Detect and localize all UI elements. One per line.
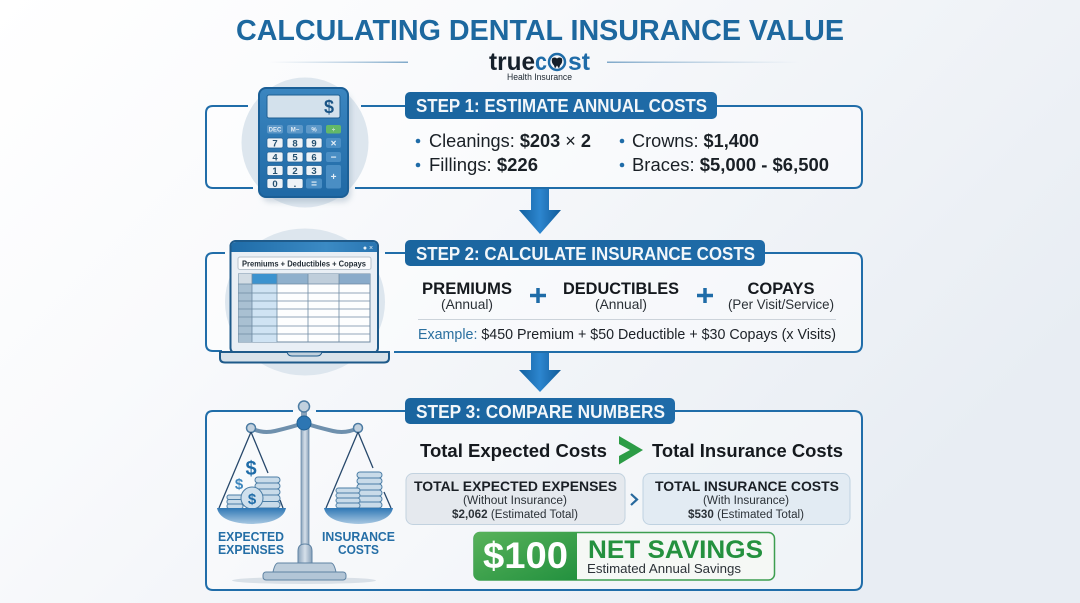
box: total expected expenses: $2,062 (Estimated Total) bbox=[452, 509, 578, 521]
panel 1 frame bbox=[206, 106, 862, 188]
logo: truecost health insurance bbox=[270, 48, 800, 82]
panel 3 frame bbox=[206, 411, 862, 590]
icon: calculator: 3 bbox=[311, 166, 317, 177]
icon: calculator: + bbox=[331, 172, 337, 183]
net savings callout: NET SAVINGS bbox=[588, 536, 763, 564]
icon: calculator: 0 bbox=[272, 179, 278, 190]
icon: laptop with spreadsheet: ● × bbox=[363, 245, 373, 252]
icon: calculator: 4 bbox=[272, 152, 278, 164]
insurance costs label bbox=[322, 529, 395, 557]
left pan with coins: $ bbox=[235, 476, 244, 493]
step 2 label: STEP 2: CALCULATE INSURANCE COSTS bbox=[416, 244, 755, 264]
cost list bbox=[416, 130, 829, 175]
icon: laptop with spreadsheet: Premiums + Deductibles + Copays bbox=[242, 258, 366, 268]
icon: calculator: 7 bbox=[272, 138, 278, 150]
logo: truecost health insurance: true bbox=[489, 48, 535, 76]
icon: calculator bbox=[242, 78, 368, 208]
cost list: Braces: $5,000 - $6,500 bbox=[632, 154, 829, 175]
box: total expected expenses: (Without Insurance) bbox=[463, 495, 567, 507]
left pan with coins: $ bbox=[245, 458, 257, 480]
icon: calculator: % bbox=[311, 128, 317, 134]
box: total insurance costs bbox=[643, 474, 850, 524]
net savings callout bbox=[474, 532, 774, 580]
premiums term bbox=[422, 280, 512, 312]
panel 2 frame bbox=[206, 253, 862, 352]
step 3 label: STEP 3: COMPARE NUMBERS bbox=[416, 402, 665, 422]
icon: calculator: × bbox=[331, 138, 337, 150]
plus sign bbox=[530, 288, 546, 303]
panel: step 2 calculate insurance costs bbox=[206, 228, 862, 376]
icon: calculator: DEC bbox=[269, 128, 282, 134]
copays term bbox=[728, 280, 834, 312]
cost list: Crowns: $1,400 bbox=[632, 130, 759, 151]
left pan with coins bbox=[217, 432, 391, 524]
copays term: (Per Visit/Service) bbox=[728, 296, 834, 312]
comparison headline: Total Expected Costs bbox=[420, 440, 607, 461]
logo: truecost health insurance: st bbox=[568, 48, 591, 76]
logo: truecost health insurance: Health Insurance bbox=[507, 72, 572, 82]
icon: calculator: $ bbox=[324, 97, 334, 117]
premiums term: PREMIUMS bbox=[422, 280, 512, 298]
icon: calculator: 1 bbox=[272, 166, 278, 177]
net savings callout: Estimated Annual Savings bbox=[587, 561, 741, 576]
icon: calculator: 5 bbox=[292, 152, 298, 164]
expected expenses label bbox=[218, 529, 284, 557]
insurance costs label: COSTS bbox=[338, 542, 379, 557]
expected expenses label: EXPENSES bbox=[218, 542, 284, 557]
step 1 label: STEP 1: ESTIMATE ANNUAL COSTS bbox=[416, 96, 707, 116]
icon: calculator: 9 bbox=[311, 138, 317, 150]
icon: calculator: M− bbox=[291, 128, 300, 134]
icon: laptop with spreadsheet bbox=[220, 228, 389, 376]
icon: calculator: ÷ bbox=[332, 128, 336, 134]
comparison headline: Total Insurance Costs bbox=[652, 440, 843, 461]
box: total expected expenses bbox=[406, 474, 625, 524]
expected expenses label: EXPECTED bbox=[218, 529, 284, 544]
icon: calculator: = bbox=[311, 179, 317, 190]
cost list: Fillings: $226 bbox=[429, 154, 538, 175]
cost list: Cleanings: $203 × 2 bbox=[429, 130, 591, 151]
insurance costs label: INSURANCE bbox=[322, 529, 395, 544]
panel: step 1 estimate annual costs bbox=[206, 78, 862, 208]
copays term: COPAYS bbox=[748, 280, 814, 298]
icon: calculator: 8 bbox=[292, 138, 298, 150]
icon: calculator: − bbox=[331, 152, 337, 164]
arrow: step 2 to step 3 bbox=[519, 353, 561, 392]
right pan with coins bbox=[324, 472, 393, 524]
icon: calculator: 2 bbox=[292, 166, 298, 177]
deductibles term: DEDUCTIBLES bbox=[563, 280, 679, 298]
box: total expected expenses: TOTAL EXPECTED EXPENSES bbox=[414, 478, 617, 494]
box: total insurance costs: $530 (Estimated Total) bbox=[688, 509, 804, 521]
title: CALCULATING DENTAL INSURANCE VALUE bbox=[236, 15, 844, 47]
example text: Example: $450 Premium + $50 Deductible + $30 Copays (x Visits) bbox=[418, 327, 836, 343]
premiums term: (Annual) bbox=[441, 296, 493, 312]
comparison headline bbox=[420, 436, 843, 464]
arrow: step 1 to step 2 bbox=[519, 189, 561, 234]
deductibles term: (Annual) bbox=[595, 296, 647, 312]
left pan with coins: $ bbox=[248, 491, 257, 508]
deductibles term bbox=[563, 280, 679, 312]
net savings callout: $100 bbox=[483, 535, 568, 576]
chevron between boxes bbox=[631, 494, 637, 505]
icon: calculator: . bbox=[294, 179, 296, 190]
plus sign bbox=[697, 288, 713, 303]
logo: truecost health insurance: c bbox=[535, 48, 547, 76]
icon: calculator: 6 bbox=[311, 152, 317, 164]
icon: balance scale bbox=[217, 401, 395, 584]
box: total insurance costs: TOTAL INSURANCE COSTS bbox=[655, 478, 839, 494]
box: total insurance costs: (With Insurance) bbox=[703, 495, 789, 507]
panel: step 3 compare numbers bbox=[206, 398, 862, 591]
